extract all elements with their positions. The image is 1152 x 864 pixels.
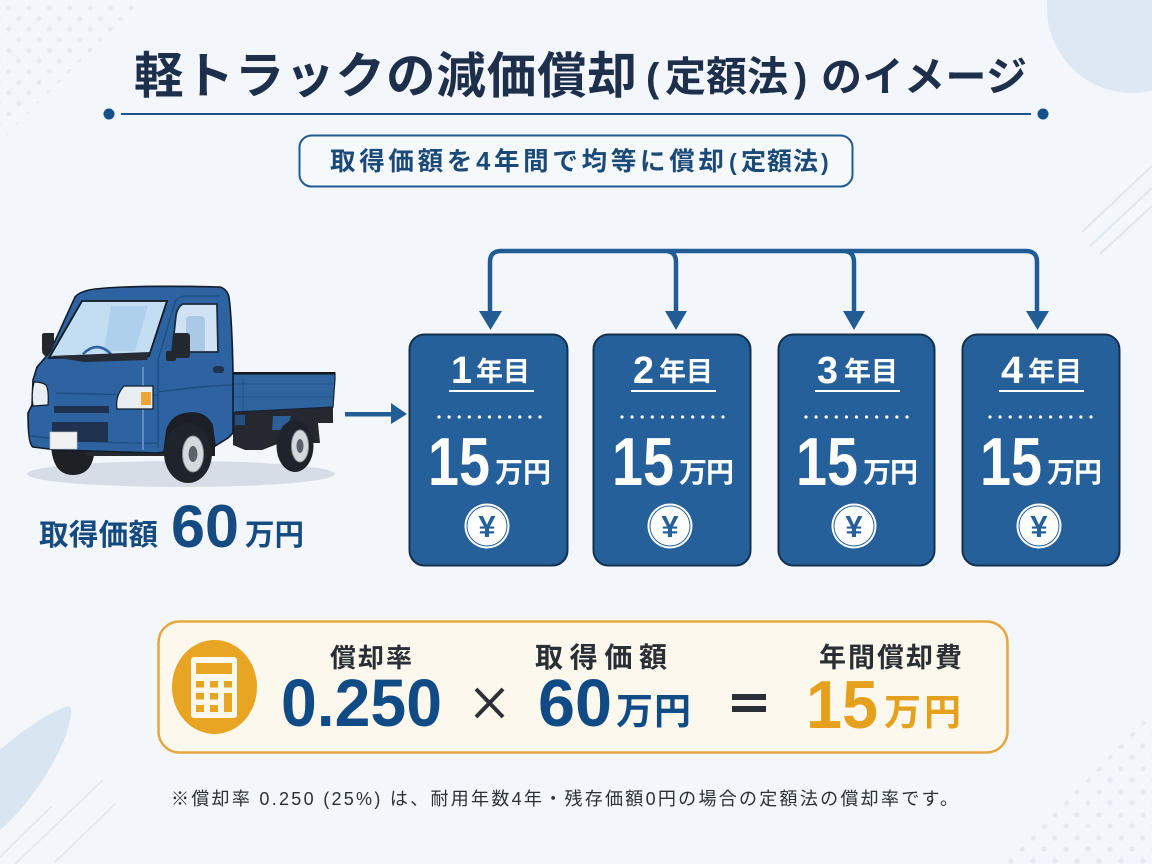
year 1 yen icon [464,504,510,548]
formula: acquisition price [535,642,691,741]
truck grille [54,406,109,413]
year 3 yen icon: ¥ [845,509,863,544]
footnote: ※償却率 0.250 (25%) は、耐用年数4年・残存価額0円の場合の定額法の償却率です。 [171,789,958,809]
year 3 amount: 15 [796,424,858,500]
truck body lines [30,296,232,448]
truck wipers [48,352,150,362]
year 2 amount: 15 [612,424,674,500]
year 2 yen icon: ¥ [661,509,679,544]
formula: acquisition price: 取得価額 [535,642,667,673]
acquisition price label: 60 [171,493,239,560]
year 4 label: 4 [1001,350,1023,392]
year 2 label: 2 [633,350,654,392]
subtitle box [300,136,852,186]
formula: annual depreciation: 年間償却費 [819,643,962,673]
year 1 yen icon: ¥ [478,509,496,544]
title: 定額法 [665,54,788,100]
year 3 amount [796,424,918,500]
title [134,49,1027,104]
year 2 amount [612,424,734,500]
formula: annual depreciation: 万円 [884,692,961,733]
title underline [104,108,1048,120]
formula: acquisition price: 60 [538,666,612,741]
panel: year 4 [962,334,1120,566]
formula: rate: 0.250 [281,666,442,741]
year 4 label: 年目 [1028,357,1082,387]
year 1 amount: 15 [428,424,490,500]
truck front wheel [164,423,212,483]
acquisition price label: 取得価額 [39,519,158,552]
acquisition price label: 万円 [245,519,304,552]
decorative dots top left [0,0,142,142]
panel: year 1 [410,334,568,566]
panel: year 2 [594,334,750,566]
arrow: truck to cards [345,403,407,424]
year 2 yen icon [648,504,692,548]
year 1 label [451,350,530,392]
equals sign [732,694,766,712]
decorative lines right [1082,166,1152,254]
subtitle box: ( [729,149,737,175]
subtitle box: 取得価額を4年間で均等に償却 [330,148,724,176]
truck shadow [27,461,335,487]
title: ( [646,56,660,100]
year 4 amount: 15 [980,424,1042,500]
year 3 label: 年目 [844,357,898,387]
year 1 amount [428,424,551,500]
year 2 dots [622,415,724,419]
title: のイメージ [821,54,1027,100]
year 1 label: 年目 [476,357,530,387]
decorative lines bottom left [0,780,115,864]
title: 軽トラックの減価償却 [134,49,637,104]
year 2 label: 年目 [659,357,713,387]
panel: year 3 [778,334,934,566]
year 4 amount: 万円 [1047,457,1102,488]
decorative leaf bottom left [0,706,71,830]
truck wheel arch [164,413,215,456]
multiply sign [476,689,503,717]
subtitle box: ) [821,149,829,175]
truck bed [232,372,335,430]
year 4 dots [990,415,1092,419]
truck mirrors [42,333,190,361]
truck windshield [49,301,167,358]
year 3 dots [806,415,908,419]
year 2 label [633,350,713,392]
year 4 yen icon: ¥ [1030,509,1048,544]
formula: annual depreciation [806,643,962,743]
year 1 amount: 万円 [495,457,551,488]
year 4 amount [980,424,1102,500]
year 4 label [1001,350,1082,392]
icon: kei truck [27,286,335,487]
year 3 amount: 万円 [863,457,918,488]
formula: annual depreciation: 15 [806,667,878,743]
title: ) [794,56,807,100]
truck highlight [142,367,144,450]
year 4 yen icon [1016,504,1062,548]
year 3 label [817,350,898,392]
decorative circle top right [1047,0,1152,93]
truck underbody [85,407,333,456]
year 1 label: 1 [451,350,472,392]
truck steering wheel [83,347,111,354]
subtitle box: 定額法 [741,148,818,176]
truck rear wheel [276,420,314,472]
panel: formula [158,622,1008,752]
truck door handle [213,366,224,373]
year 2 amount: 万円 [679,457,734,488]
year 1 dots [439,415,541,419]
icon: calculator [172,640,257,734]
truck side window [172,304,218,352]
truck headlights [32,382,48,406]
arrows: distribution to four years [479,251,1049,330]
decorative dots bottom right [1005,712,1152,864]
formula: acquisition price: 万円 [616,691,691,732]
truck far front wheel [51,446,95,475]
formula: rate: 償却率 [330,643,412,673]
acquisition price label [39,493,304,560]
year 3 yen icon [832,504,876,548]
truck cab body [28,286,233,453]
year 3 label: 3 [817,350,838,392]
truck plate [50,432,77,449]
